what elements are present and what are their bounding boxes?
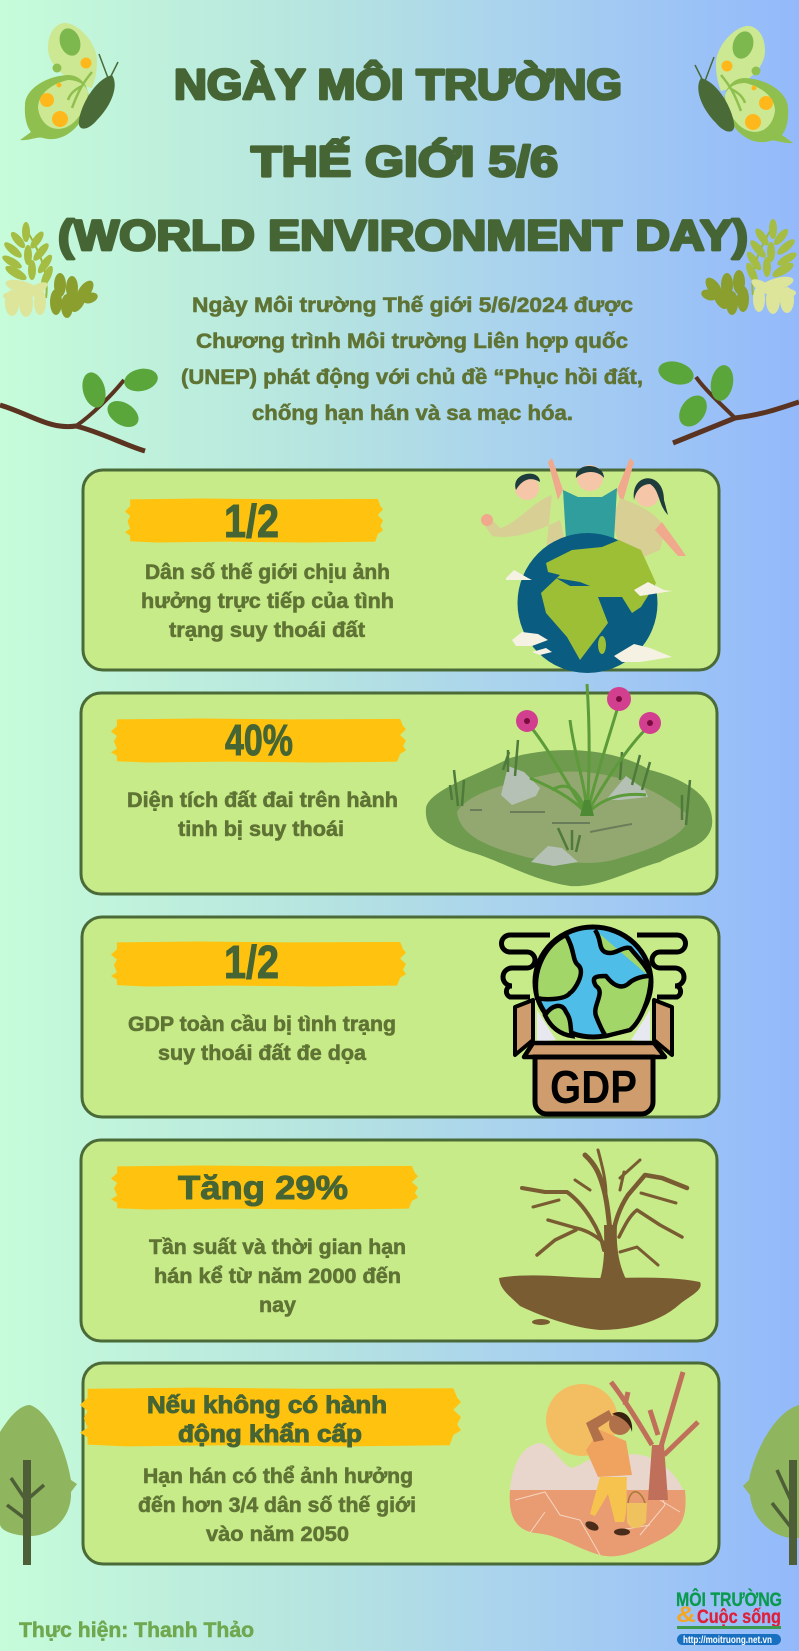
description 1: hưởng trực tiếp của tình xyxy=(141,590,394,613)
description 4: nay xyxy=(259,1294,296,1317)
stat 40%: 40% xyxy=(225,716,293,765)
title: (WORLD ENVIRONMENT DAY) xyxy=(58,212,748,260)
illustration: GDP globe in box: GDP xyxy=(550,1061,637,1113)
panel: card 5 xyxy=(80,1363,719,1564)
icon: butterfly right xyxy=(695,26,793,143)
logo: Cuộc sống xyxy=(697,1607,781,1628)
banner 3 xyxy=(111,941,406,987)
intro text: chống hạn hán và sa mạc hóa. xyxy=(252,402,573,425)
banner 5 xyxy=(80,1388,461,1446)
description 2: tinh bị suy thoái xyxy=(178,818,344,841)
illustration: person in drought xyxy=(510,1372,698,1556)
banner heading: Nếu không có hành xyxy=(147,1392,387,1419)
panel: card 3 xyxy=(82,917,719,1117)
intro text: Chương trình Môi trường Liên hợp quốc xyxy=(196,330,628,353)
description 2 xyxy=(127,789,398,841)
intro text xyxy=(181,294,643,425)
description 2: Diện tích đất đai trên hành xyxy=(127,789,398,812)
icon: butterfly left xyxy=(20,23,118,140)
description 4: hán kể từ năm 2000 đến xyxy=(154,1265,401,1288)
description 4: Tần suất và thời gian hạn xyxy=(149,1236,406,1259)
banner 4 xyxy=(111,1165,418,1210)
banner heading xyxy=(147,1392,387,1448)
icon: tree left xyxy=(0,1405,77,1565)
credit: Thực hiện: Thanh Thảo xyxy=(19,1619,254,1642)
logo xyxy=(676,1589,782,1646)
banner heading: động khẩn cấp xyxy=(178,1421,362,1448)
stat 1/2: 1/2 xyxy=(224,495,279,547)
description 3: GDP toàn cầu bị tình trạng xyxy=(128,1013,396,1036)
icon: fern left xyxy=(0,222,99,318)
title: NGÀY MÔI TRƯỜNG xyxy=(174,60,622,109)
stat Tăng 29%: Tăng 29% xyxy=(178,1169,348,1206)
illustration: people on globe xyxy=(481,458,686,673)
description 3: suy thoái đất đe dọa xyxy=(158,1042,366,1065)
logo: & xyxy=(676,1602,696,1627)
title: THẾ GIỚI 5/6 xyxy=(251,137,558,186)
illustration: dead tree xyxy=(499,1150,701,1330)
illustration: degraded land with flowers xyxy=(426,684,712,886)
title xyxy=(58,60,748,260)
panel: card 4 xyxy=(81,1140,717,1341)
icon: branch right xyxy=(656,358,799,443)
intro text: Ngày Môi trường Thế giới 5/6/2024 được xyxy=(192,294,633,317)
description 5: vào năm 2050 xyxy=(206,1523,349,1546)
icon: tree right xyxy=(743,1405,799,1565)
description 5 xyxy=(138,1465,416,1546)
description 1 xyxy=(141,561,394,642)
description 5: đến hơn 3/4 dân số thế giới xyxy=(138,1494,416,1517)
description 4 xyxy=(149,1236,406,1317)
description 5: Hạn hán có thể ảnh hưởng xyxy=(143,1465,413,1488)
panel: card 1 xyxy=(83,458,719,673)
stat 1/2: 1/2 xyxy=(224,936,279,988)
illustration: GDP globe in box xyxy=(502,927,686,1114)
banner 2 xyxy=(111,718,406,763)
description 1: trạng suy thoái đất xyxy=(169,619,365,642)
icon: fern right xyxy=(700,219,799,315)
description 1: Dân số thế giới chịu ảnh xyxy=(145,561,390,584)
panel: card 2 xyxy=(81,684,717,894)
description 3 xyxy=(128,1013,396,1065)
icon: branch left xyxy=(0,366,160,451)
intro text: (UNEP) phát động với chủ đề “Phục hồi đất, xyxy=(181,366,643,389)
logo: http://moitruong.net.vn xyxy=(683,1635,772,1646)
banner 1 xyxy=(125,498,383,543)
